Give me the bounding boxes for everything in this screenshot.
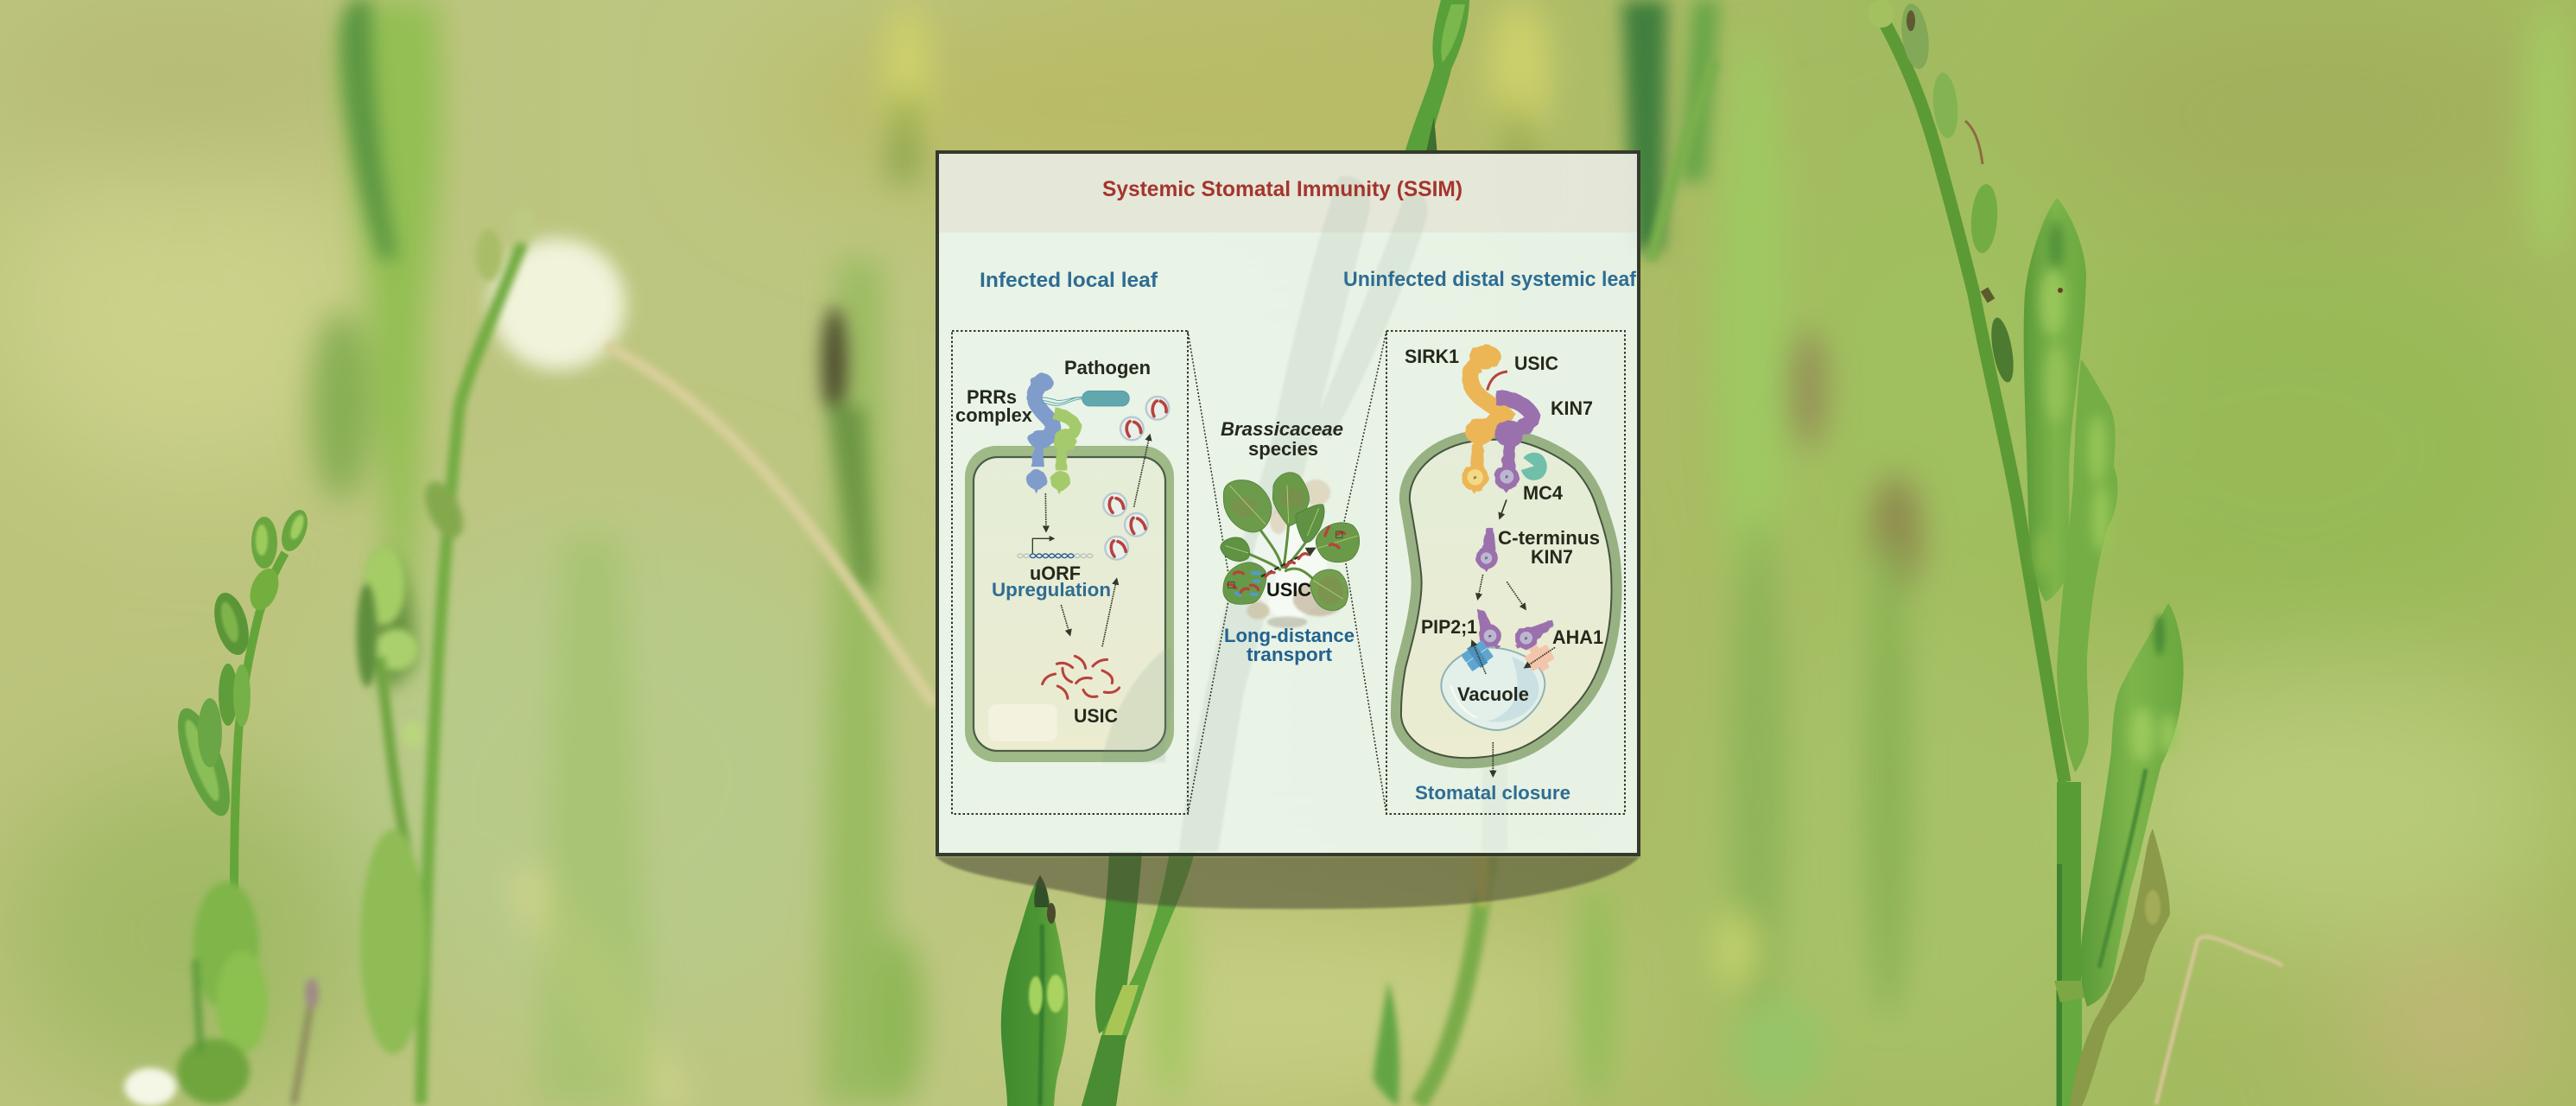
arrow: upregulation to USIC — [1061, 605, 1070, 635]
label: Brassicaceae species: Brassicaceae — [1221, 418, 1343, 440]
icon: phosphorylated KIN7 at AHA1: P — [1525, 636, 1527, 640]
left cell artwork, scaled from zoom coordinates — [1017, 373, 1169, 560]
label: Brassicaceae species: species — [1248, 438, 1318, 460]
icon: DNA helix — [1017, 554, 1093, 558]
icon: KIN7 receptor: P — [1506, 475, 1508, 480]
icon: Brassicaceae rosette leaves — [1221, 473, 1360, 611]
icon: USIC peptide on receptor — [1488, 372, 1507, 391]
label: USIC on plant: USIC — [1266, 579, 1311, 601]
right sharp plant: lower pod — [2081, 603, 2184, 1007]
icon: SIRK1 receptor: P — [1474, 475, 1477, 480]
left plant, sharp stem with buds — [168, 506, 313, 890]
icon: C-terminus KIN7 fragment — [1475, 529, 1498, 572]
label: long-distance transport — [1224, 625, 1355, 665]
dried twig — [2156, 937, 2282, 1104]
panel: left cell — [965, 446, 1174, 762]
icon: phosphorylated KIN7 at PIP2;1: P — [1488, 634, 1492, 639]
label: AHA1: AHA1 — [1552, 626, 1603, 648]
icon: MC4 protease — [1521, 453, 1547, 480]
left plant, lower blurred pods — [124, 881, 319, 1106]
label: PRRs complex: PRRs — [967, 386, 1017, 408]
icon: phosphorylated KIN7 at PIP2;1 — [1477, 609, 1501, 649]
icon: AHA1 proton pump — [1522, 640, 1558, 676]
arrow: cleavage — [1500, 499, 1507, 518]
label: Vacuole: Vacuole — [1457, 683, 1529, 705]
zoom guide lines — [1188, 331, 1386, 814]
panel: infected local leaf detail box — [952, 331, 1188, 814]
arrow: receptor to uORF — [1044, 493, 1048, 531]
label: PRRs complex: complex — [955, 404, 1033, 426]
heading: infected local leaf: Infected local leaf — [980, 269, 1158, 292]
panel: infographic card — [937, 152, 1639, 855]
right sharp plant: upper small pods — [1869, 0, 2017, 384]
label: Pathogen: Pathogen — [1064, 357, 1151, 378]
label: long-distance transport: transport — [1247, 644, 1333, 665]
lower central sharp pod — [1001, 875, 1068, 1106]
right sharp plant: back pod — [2057, 359, 2117, 772]
lower right blurred stem — [1374, 838, 1490, 1106]
label: PIP2;1: PIP2;1 — [1421, 616, 1477, 638]
title: Systemic Stomatal Immunity (SSIM) — [1102, 177, 1462, 201]
arrow: vesicles exported — [1134, 435, 1150, 507]
right sharp plant: front pod — [2024, 198, 2086, 601]
icon: green co-receptor — [1050, 413, 1076, 494]
ghost leaf over left cell — [1102, 645, 1172, 762]
central sharp stem above the panel — [1404, 0, 1469, 156]
label: C-terminus KIN7: C-terminus — [1498, 527, 1600, 549]
icon: pathogen — [1041, 391, 1129, 406]
icon: PIP2;1 aquaporin channel — [1460, 639, 1494, 673]
label: KIN7: KIN7 — [1551, 397, 1593, 419]
icon: vacuole — [1441, 647, 1545, 730]
icon: C-terminus KIN7 fragment: P — [1485, 556, 1488, 561]
label: uORF: uORF — [1030, 563, 1081, 584]
panel: systemic leaf detail box — [1386, 331, 1625, 814]
icon: phosphorylated KIN7 at AHA1 — [1515, 620, 1554, 649]
label: long-distance transport: Long-distance — [1224, 625, 1355, 646]
title band — [939, 154, 1637, 232]
label: USIC on receptor: USIC — [1514, 353, 1558, 374]
icon: long-distance arrow with USIC — [1228, 527, 1345, 598]
soil ghost — [1247, 480, 1345, 628]
lower central sharp stems — [1082, 851, 1195, 1106]
label: C-terminus KIN7 — [1498, 527, 1600, 568]
left plant, mid-focus stem — [357, 209, 535, 1104]
heading: uninfected distal systemic leaf: Uninfected distal systemic leaf — [1343, 268, 1637, 291]
lower right artwork, scaled from zoom coordinates — [1441, 575, 1558, 776]
label: C-terminus KIN7: KIN7 — [1531, 546, 1573, 568]
label: PRRs complex — [955, 386, 1033, 426]
label: USIC peptides: USIC — [1074, 705, 1118, 727]
icon: PRR blue receptor — [1027, 373, 1053, 493]
label: MC4: MC4 — [1523, 482, 1564, 504]
arrows: C-terminus KIN7 to targets — [1478, 575, 1526, 609]
label: Stomatal closure: Stomatal closure — [1415, 782, 1570, 804]
arrow: USIC to vesicles — [1102, 579, 1117, 646]
icon: promoter arrow — [1032, 538, 1054, 555]
label: Brassicaceae species — [1221, 418, 1343, 460]
panel shadow — [936, 856, 1640, 909]
right sharp plant: main stem — [1879, 12, 2097, 1106]
label: SIRK1: SIRK1 — [1405, 346, 1459, 367]
icon: SIRK1 receptor — [1462, 345, 1505, 494]
center plant, scaled from zoom coordinates — [1221, 473, 1360, 628]
arrows: water and proton flux — [1472, 641, 1555, 776]
label: Upregulation: Upregulation — [992, 579, 1111, 601]
icon: USIC peptides — [1043, 656, 1120, 698]
ghosted stems through the panel — [1179, 176, 1507, 851]
right sharp plant: tan pod — [2070, 829, 2170, 1106]
icon: KIN7 receptor — [1494, 397, 1532, 493]
icon: USIC vesicles — [1103, 397, 1169, 560]
panel: right guard cell — [1401, 440, 1612, 758]
upper right artwork, scaled from zoom coordinates — [1462, 345, 1547, 572]
